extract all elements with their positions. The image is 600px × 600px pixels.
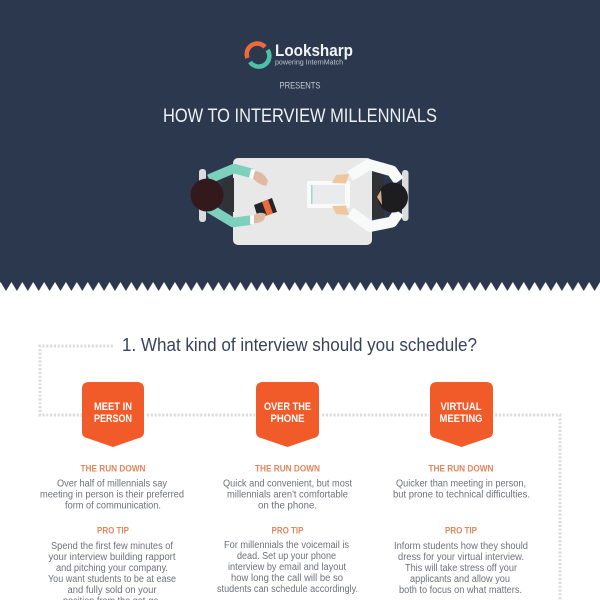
text: run down: meeting in person is their preferred (40, 490, 184, 500)
table (233, 158, 372, 245)
text: run down: millennials aren't comfortable (227, 490, 348, 500)
text: pro tip: interview by email and layout (228, 562, 346, 573)
text: pro tip (48, 526, 176, 600)
text: run down (40, 464, 184, 512)
logo tagline: powering InternMatch (275, 58, 343, 66)
text: pro tip: You want students to be at ease (48, 574, 176, 585)
text: pro tip: For millennials the voicemail is (224, 540, 349, 551)
column: over the phone (217, 382, 358, 595)
text: run down (223, 464, 352, 512)
illustration: interview across a table (190, 158, 408, 245)
column: virtual meeting (393, 382, 530, 596)
heading: section 1: 1. What kind of interview should you schedule? (122, 335, 477, 355)
text: run down: THE RUN DOWN (80, 464, 146, 474)
connector: dotted path (40, 346, 560, 600)
badge: virtual meeting: VIRTUAL (440, 401, 482, 413)
text: pro tip: applicants and allow you (410, 574, 510, 585)
icon: logo ring (247, 44, 269, 67)
badge: meet in person: PERSON (94, 413, 132, 425)
text: pro tip: and pitching your company. (56, 563, 168, 574)
text: run down: Quicker than meeting in person, (396, 478, 526, 490)
left person (190, 168, 268, 224)
badge: virtual meeting: MEETING (440, 413, 482, 425)
text: pro tip: PRO TIP (97, 526, 129, 536)
column: meet in person (40, 382, 184, 600)
badge: over the phone (256, 382, 319, 447)
text: run down: THE RUN DOWN (428, 464, 494, 474)
text: run down: THE RUN DOWN (255, 464, 320, 474)
badge: over the phone: OVER THE (264, 401, 311, 413)
right chair (372, 170, 408, 221)
text: pro tip: PRO TIP (445, 526, 477, 536)
text: pro tip: Spend the first few minutes of (51, 541, 173, 552)
text: pro tip: dress for your virtual interview. (398, 552, 524, 563)
logo: Looksharp (247, 41, 353, 67)
text: pro tip: and fully sold on your (68, 585, 157, 596)
panel: dark header with zigzag edge (0, 0, 600, 291)
text: run down: on the phone. (258, 500, 317, 512)
text: pro tip: both to focus on what matters. (399, 585, 522, 596)
text: run down: Quick and convenient, but most (223, 478, 352, 490)
paper document (307, 181, 350, 208)
right person (332, 164, 408, 226)
badge: over the phone: PHONE (270, 413, 304, 425)
text: run down: but prone to technical difficulties. (393, 490, 530, 500)
badge: meet in person: MEET IN (94, 401, 132, 413)
text: run down: Over half of millennials say (57, 478, 167, 490)
text: pro tip: students can schedule accordingly. (217, 584, 358, 595)
title: HOW TO INTERVIEW MILLENNIALS (163, 106, 437, 127)
text: pro tip: dead. Set up your phone (237, 551, 336, 562)
presents label: PRESENTS (280, 80, 320, 92)
text: pro tip (394, 526, 528, 596)
badge: virtual meeting (430, 382, 493, 447)
phone (254, 198, 277, 223)
text: pro tip: your interview building rapport (48, 552, 176, 563)
text: pro tip: how long the call will be so (231, 573, 343, 584)
text: pro tip: Inform students how they should (394, 541, 528, 552)
logo wordmark: Looksharp (275, 41, 353, 60)
left chair (199, 169, 234, 222)
text: pro tip: PRO TIP (272, 526, 304, 536)
badge: meet in person (82, 382, 144, 447)
text: run down: form of communication. (65, 500, 161, 512)
text: pro tip (217, 526, 358, 595)
text: pro tip: This will take stress off your (405, 563, 518, 574)
text: run down (393, 464, 530, 500)
